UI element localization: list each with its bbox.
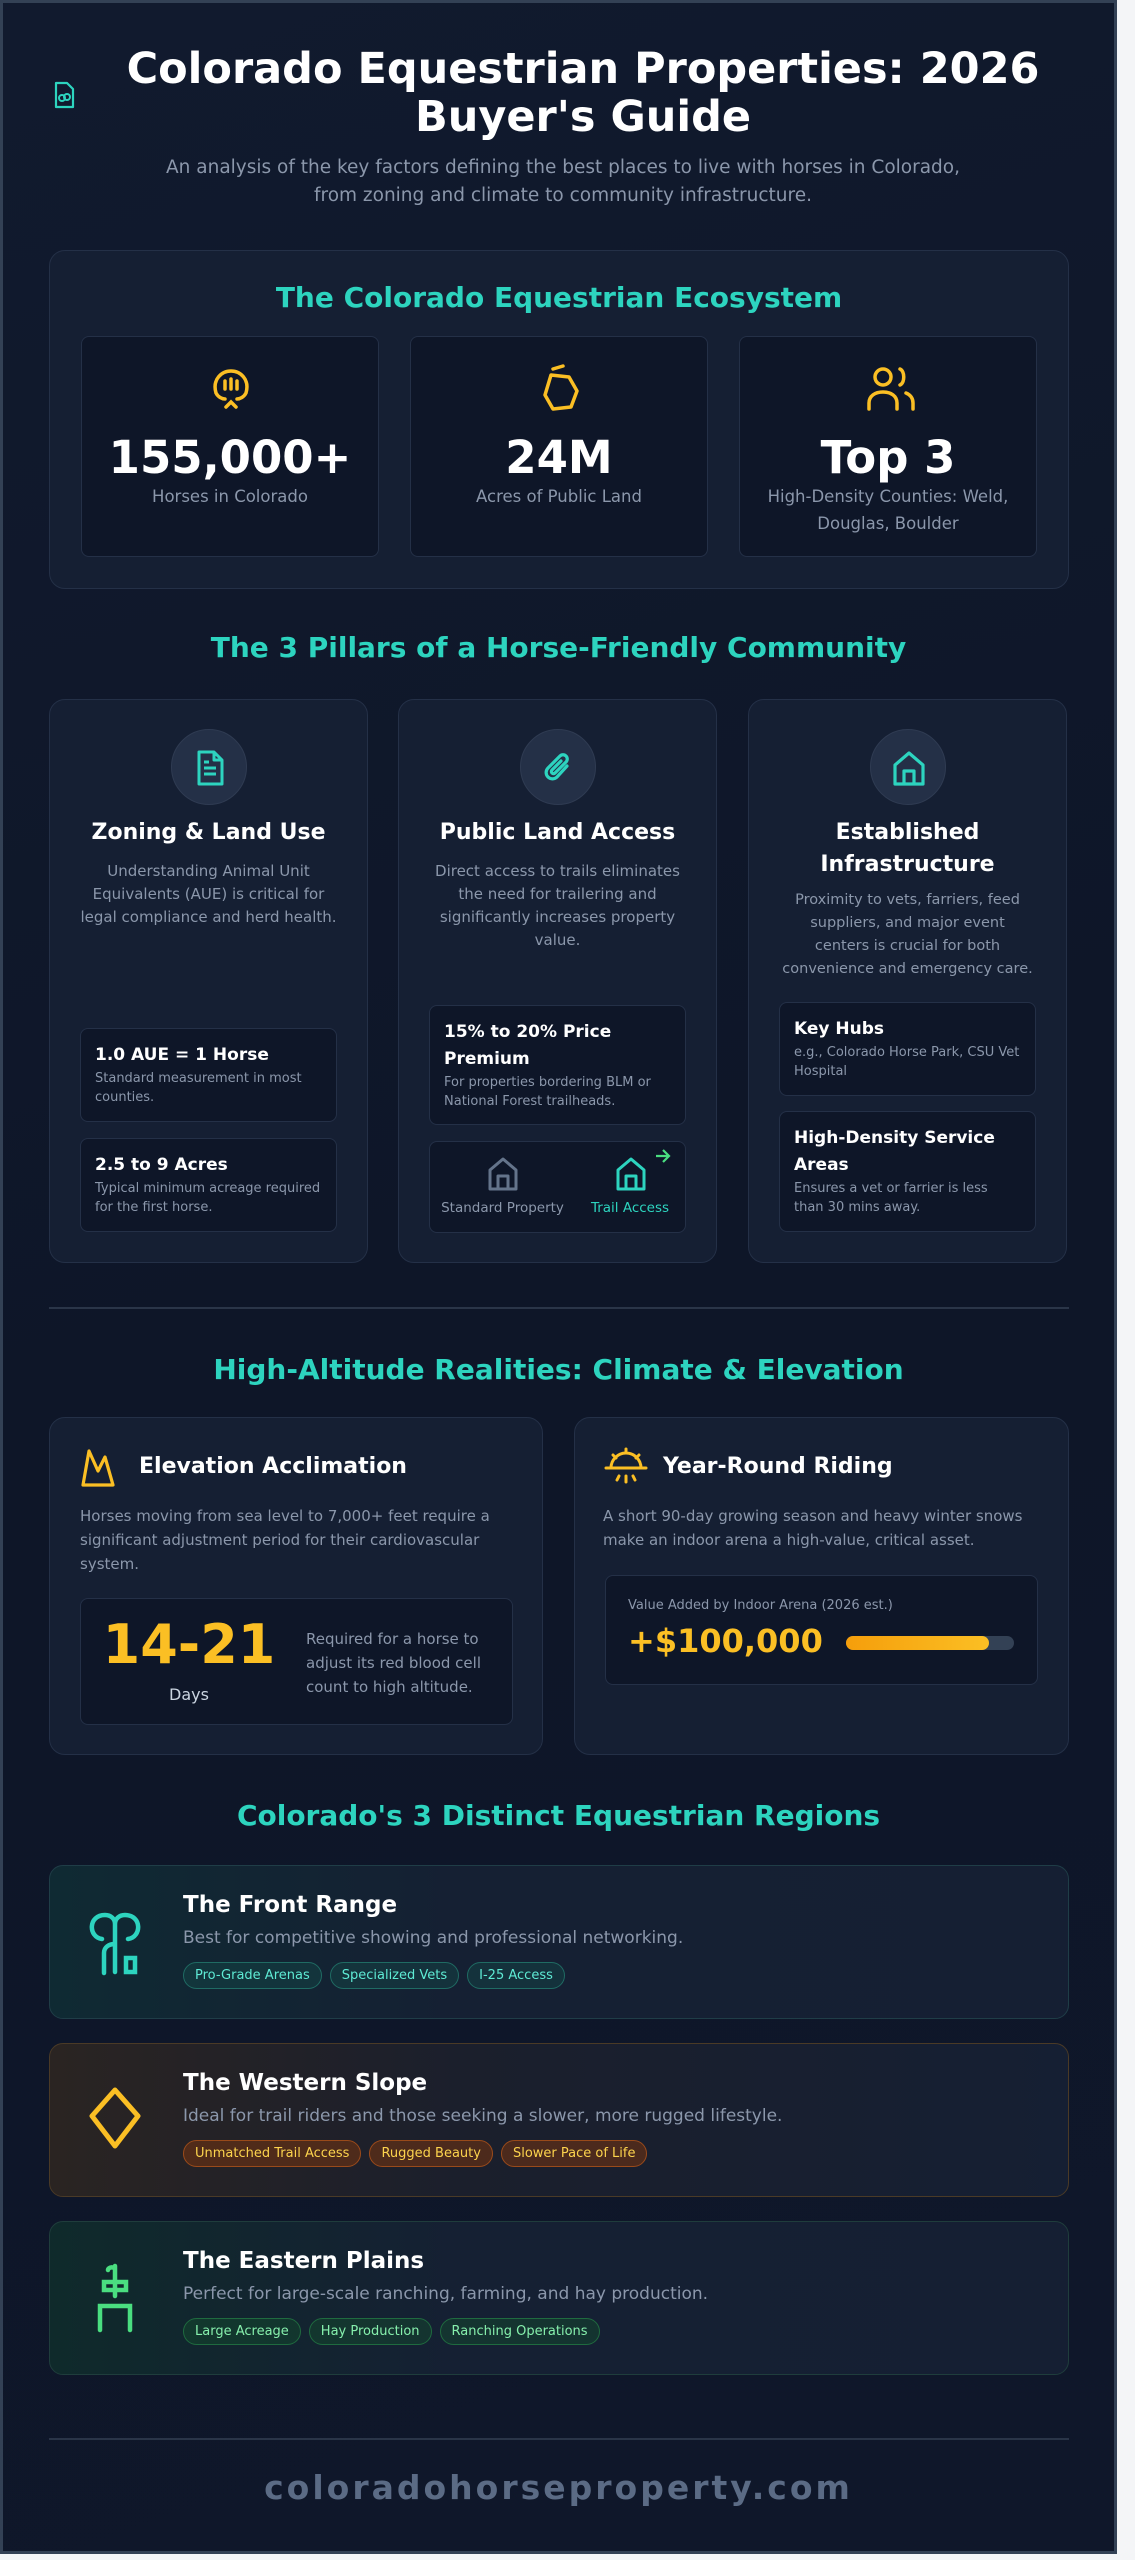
callout: service areas [779,1111,1036,1232]
comparison: standard vs trail: Standard Property [441,1200,564,1216]
icon: mountain [81,1449,115,1487]
stat: horses: Horses in Colorado [152,487,308,506]
callout: 14-21 days: 14-21 [103,1613,275,1676]
icon: front range [90,1912,140,1976]
tags: eastern plains: Large Acreage [195,2324,289,2339]
title: Buyer's Guide [415,92,751,142]
stat: counties: Top 3 [821,431,955,484]
callout: 14-21 days [80,1598,513,1725]
text: zoning desc: Understanding Animal Unit Equivalents (AUE) is critical for legal compliance and herd health. [80,862,337,926]
heading: regions: Colorado's 3 Distinct Equestrian Regions [237,1799,880,1832]
callout: service areas: Ensures a vet or farrier is less than 30 mins away. [794,1181,988,1215]
panel: year-round [574,1417,1069,1755]
callout: key hubs [779,1002,1036,1096]
title: infrastructure [820,820,995,877]
icon: paperclip [520,729,596,805]
icon: plant [98,2264,132,2332]
text: infra desc [782,892,1033,977]
callout: AUE [80,1028,337,1122]
callout: AUE: Standard measurement in most counties. [95,1071,302,1105]
callout: service areas: High-Density Service Areas [794,1128,995,1175]
panel: public land [398,699,717,1263]
region: front range: The Front Range [183,1892,397,1918]
tags: front range [183,1962,565,1989]
heading: climate: High-Altitude Realities: Climate & Elevation [213,1353,904,1386]
heading: pillars: The 3 Pillars of a Horse-Friendly Community [211,631,906,664]
tags: eastern plains [183,2318,600,2345]
icon: diamond [89,2088,141,2148]
heading: ecosystem: The Colorado Equestrian Ecosystem [276,281,842,314]
tags: front range: I-25 Access [479,1968,553,1983]
comparison: standard vs trail [429,1141,686,1233]
subtitle [166,157,960,206]
callout: premium: 15% to 20% Price Premium [444,1022,611,1069]
stat: public land [410,336,708,557]
callout: AUE: 1.0 AUE = 1 Horse [95,1045,269,1065]
text: elevation desc: Horses moving from sea level to 7,000+ feet require a significant adjustment period for their cardiovascular system. [80,1507,490,1573]
callout: acres: Typical minimum acreage required for the first horse. [95,1181,320,1215]
stat: public land: Acres of Public Land [476,487,642,506]
panel: ecosystem [49,250,1069,589]
region: eastern plains: The Eastern Plains [183,2248,424,2274]
title: infrastructure: Established [836,820,979,845]
panel: infrastructure [748,699,1067,1263]
callout: 14-21 days: Days [169,1685,209,1704]
icon: home [870,729,946,805]
icon: document [54,82,74,108]
subtitle: from zoning and climate to community infrastructure. [314,185,812,206]
text: public land desc: Direct access to trails eliminates the need for trailering and significantly increases property value. [435,862,680,949]
tags: eastern plains: Ranching Operations [452,2324,588,2339]
footer: website: coloradohorseproperty.com [264,2468,853,2507]
title: Colorado Equestrian Properties: 2026 [127,44,1039,94]
title: year-round: Year-Round Riding [663,1454,893,1479]
callout: acres: 2.5 to 9 Acres [95,1155,228,1175]
text: year-round desc: A short 90-day growing season and heavy winter snows make an indoor arena a high-value, critical asset. [603,1507,1022,1549]
tags: front range: Pro-Grade Arenas [195,1968,310,1983]
tags: western slope [183,2140,647,2167]
tags: front range: Specialized Vets [342,1968,447,1983]
callout: premium: For properties bordering BLM or National Forest trailheads. [444,1075,651,1109]
title: infrastructure: Infrastructure [820,852,995,877]
panel: zoning [49,699,368,1263]
comparison: standard vs trail: Trail Access [591,1200,669,1216]
icon: sun/arena [604,1448,648,1484]
panel: elevation [49,1417,543,1755]
stat: horses [81,336,379,557]
chart: indoor arena value [605,1575,1038,1685]
icon: document [171,729,247,805]
chart: indoor arena value: +$100,000 [628,1622,823,1660]
tags: western slope: Rugged Beauty [381,2146,481,2161]
icon: standard house [488,1158,518,1190]
title: zoning: Zoning & Land Use [92,820,326,845]
region: eastern plains [49,2221,1069,2375]
title: public land: Public Land Access [440,820,675,845]
stat: counties [739,336,1037,557]
stat: horses: 155,000+ [109,431,351,484]
text: infra desc: convenience and emergency care. [782,961,1033,977]
callout: key hubs: Key Hubs [794,1019,884,1039]
region: eastern plains: Perfect for large-scale ranching, farming, and hay production. [183,2284,708,2304]
tags: eastern plains: Hay Production [321,2324,420,2339]
region: front range [49,1865,1069,2019]
region: western slope: Ideal for trail riders and those seeking a slower, more rugged lifestyle. [183,2106,782,2126]
callout: acres [80,1138,337,1232]
tags: western slope: Slower Pace of Life [513,2146,635,2161]
text: infra desc: suppliers, and major event [810,915,1005,931]
region: western slope: The Western Slope [183,2070,427,2096]
callout: key hubs: e.g., Colorado Horse Park, CSU Vet Hospital [794,1045,1019,1079]
text: infra desc: Proximity to vets, farriers, feed [795,892,1020,908]
title [127,44,1039,142]
text: infra desc: centers is crucial for both [815,938,1000,954]
icon: trail house [616,1158,646,1190]
callout: 14-21 days: Required for a horse to adjust its red blood cell count to high altitude. [306,1630,481,1696]
callout: premium [429,1005,686,1125]
chart: indoor arena value: Value Added by Indoor Arena (2026 est.) [628,1598,893,1613]
tags: western slope: Unmatched Trail Access [195,2146,349,2161]
subtitle: An analysis of the key factors defining the best places to live with horses in Colorado, [166,157,960,178]
region: front range: Best for competitive showing and professional networking. [183,1928,683,1948]
stat: public land: 24M [505,431,613,484]
region: western slope [49,2043,1069,2197]
title: elevation: Elevation Acclimation [139,1454,407,1479]
stat: counties: High-Density Counties: Weld, Douglas, Boulder [768,487,1008,533]
